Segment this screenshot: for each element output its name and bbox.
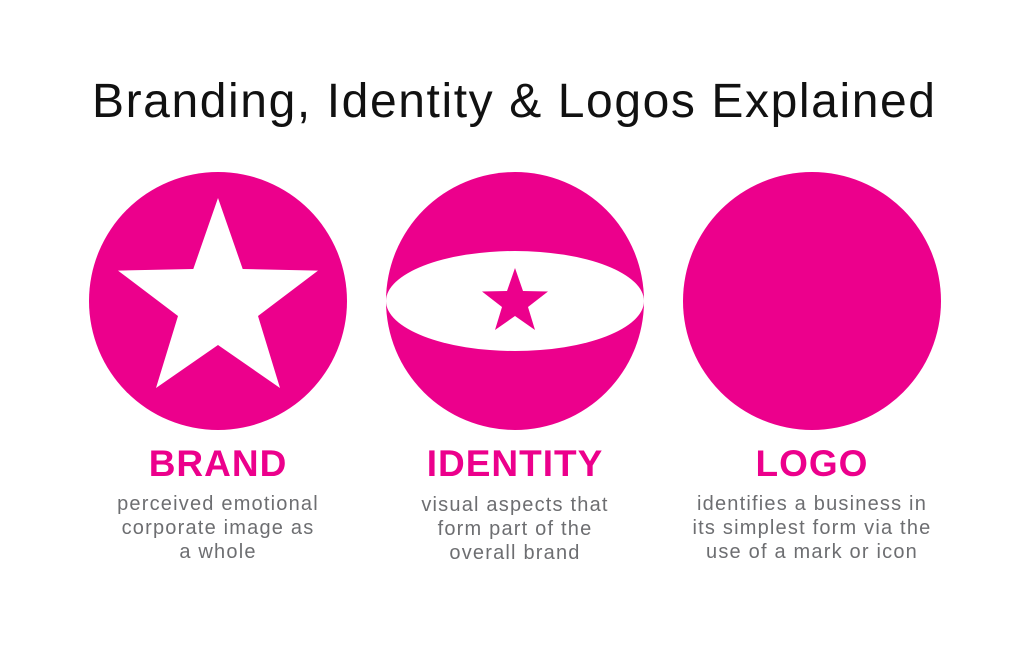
heading: LOGO: LOGO xyxy=(756,443,868,484)
panel: identity xyxy=(386,172,644,564)
icon: brand circle with star xyxy=(89,172,347,430)
text: identity description: visual aspects that xyxy=(421,494,609,516)
icon: logo circle xyxy=(683,172,941,430)
text: brand description: a whole xyxy=(179,541,257,563)
text: brand description: perceived emotional xyxy=(117,493,319,515)
text: identity description: overall brand xyxy=(449,542,581,564)
heading: IDENTITY: IDENTITY xyxy=(427,443,603,484)
text: logo description: its simplest form via the xyxy=(693,517,931,539)
text: brand description: corporate image as xyxy=(122,517,314,539)
panel: brand xyxy=(89,172,347,563)
heading: BRAND: BRAND xyxy=(149,443,287,484)
panel: logo xyxy=(683,172,941,563)
title: Branding, Identity & Logos Explained xyxy=(92,75,935,128)
text: logo description: identifies a business in xyxy=(697,493,927,515)
icon: identity circle with ellipse and star xyxy=(386,172,644,430)
text: identity description: form part of the xyxy=(438,518,592,540)
text: logo description: use of a mark or icon xyxy=(706,541,918,563)
